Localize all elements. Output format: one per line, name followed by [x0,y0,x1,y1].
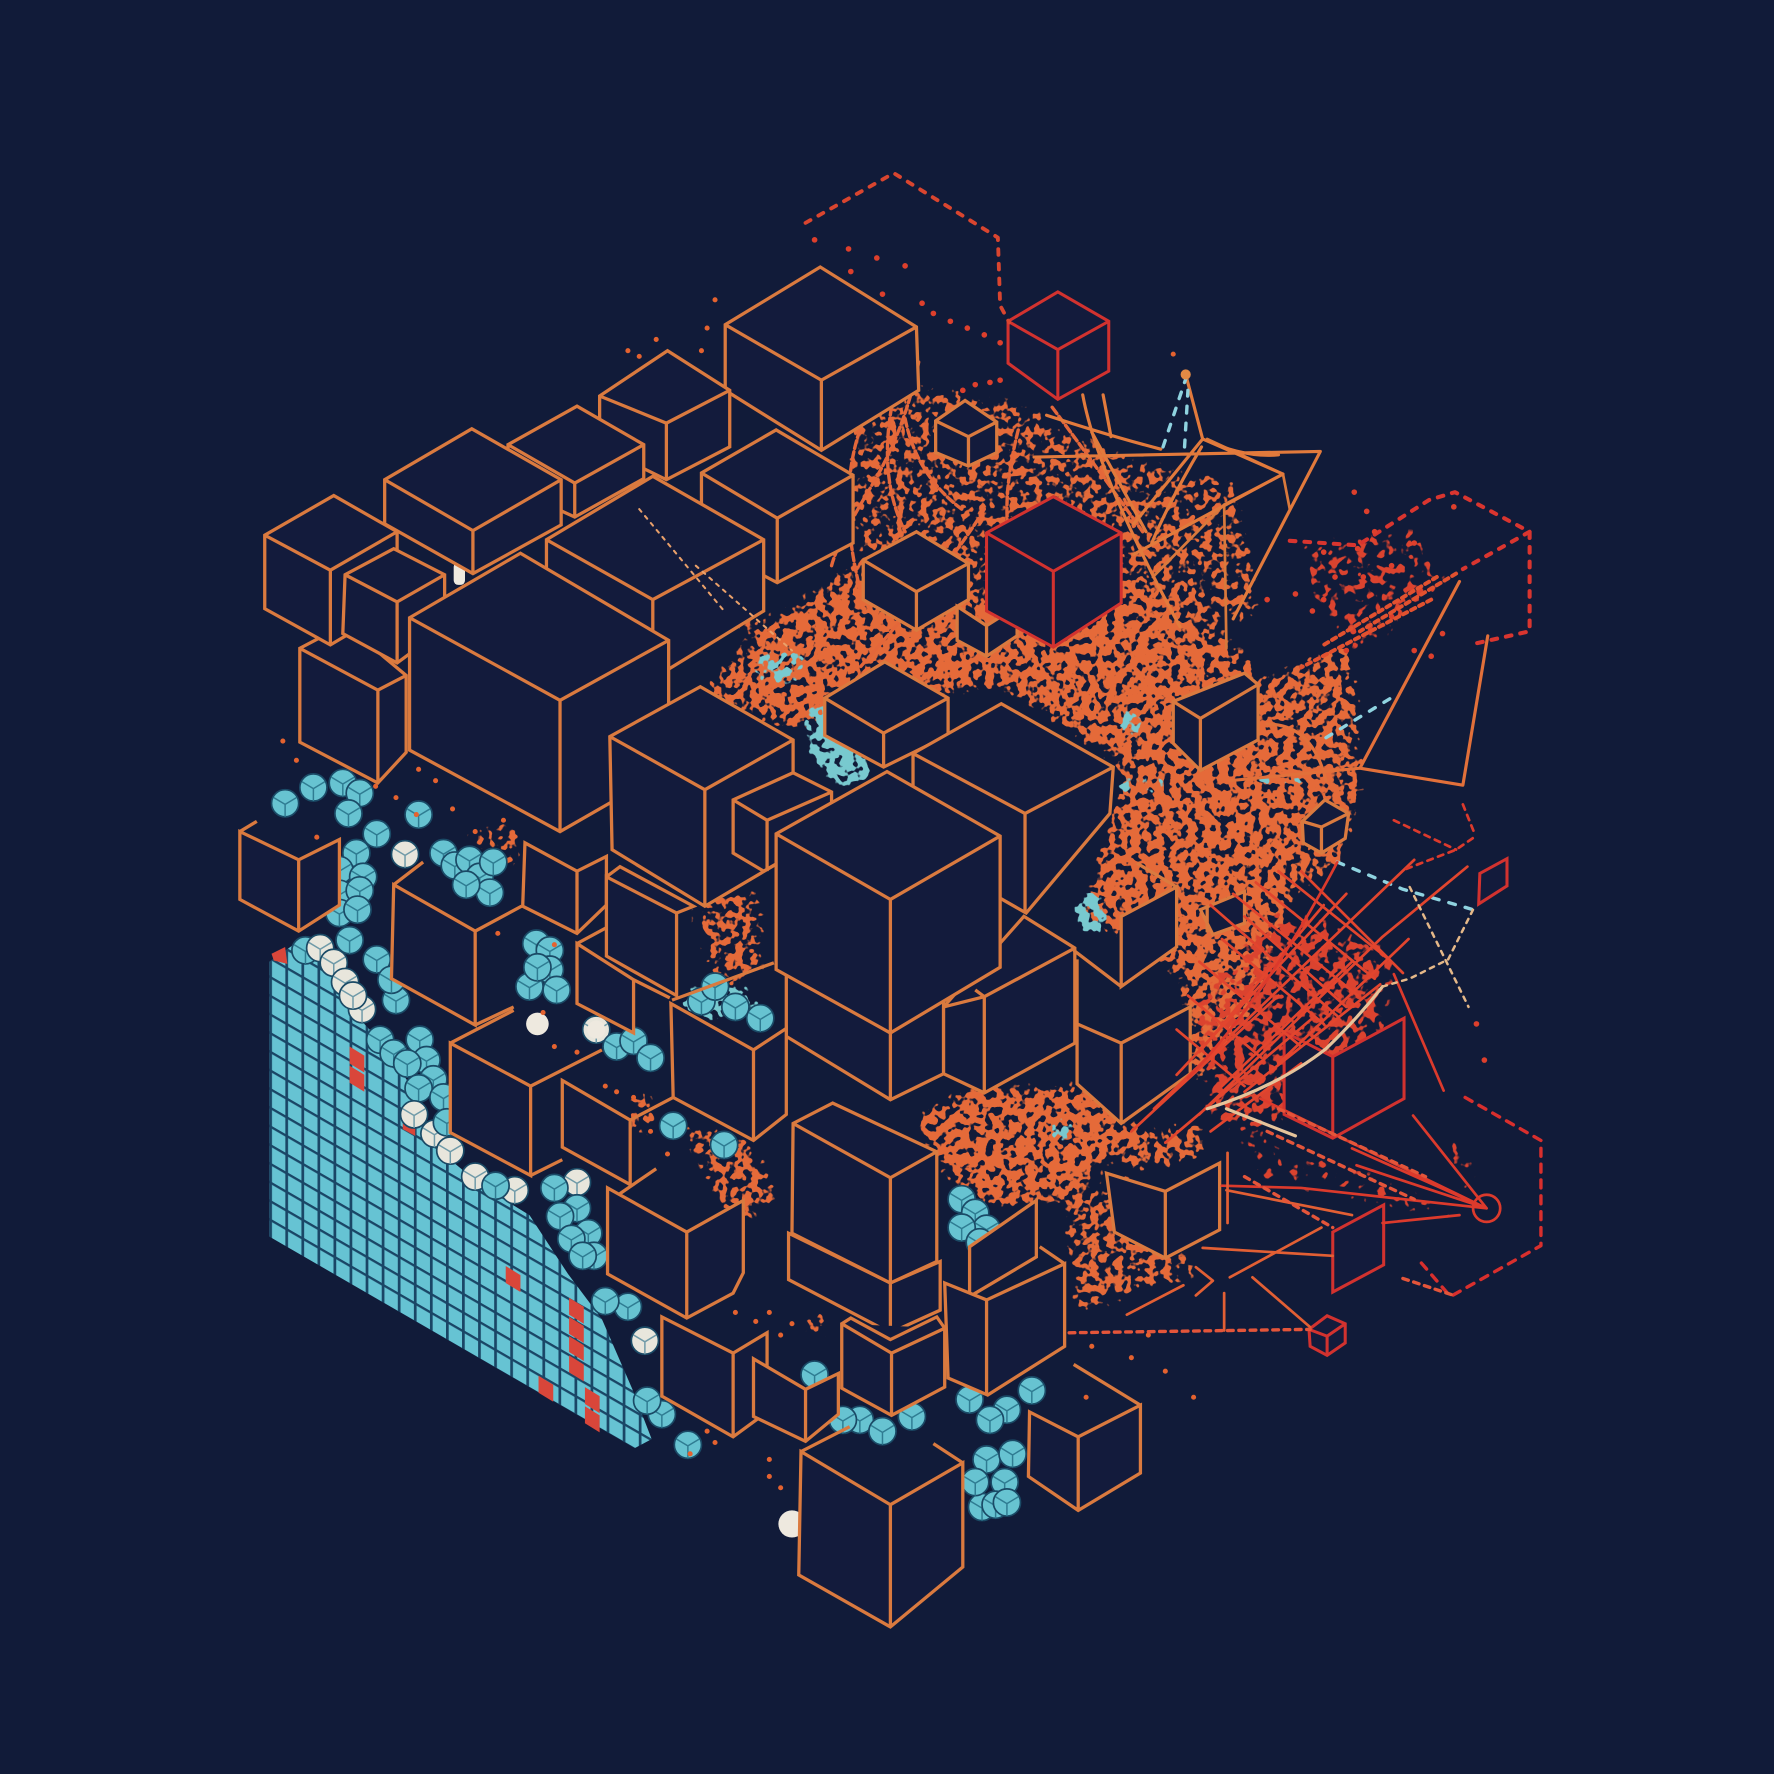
cube 18: open top [240,821,339,931]
cube 5 [300,625,406,783]
cube 12 [913,704,1113,913]
cube 1 [725,267,919,450]
cube 48: red face [1333,1205,1384,1292]
cube 30: tall [792,1103,937,1283]
panel: teal tile grid wall [269,938,652,1448]
cube 38: open top [957,606,1017,656]
faint orange cube upper right [1153,439,1290,648]
cube 23: open top [671,963,786,1140]
cube 37 [863,532,968,630]
cube 45: small [1302,800,1349,853]
cubes, back to front [240,267,1507,1627]
right strands [1230,582,1488,785]
star tip dot [1181,369,1191,380]
cube 2 [600,351,730,480]
white particles [454,562,806,1538]
cube 14 [610,687,793,906]
cube 28: open top [753,1359,838,1441]
cube 24: left face, open top [450,1010,602,1176]
cube 27: open top [662,1317,767,1437]
cube 9 [546,476,764,679]
cube 8 [701,430,853,583]
cream strands [1207,987,1383,1136]
cube 26: open top [608,1169,743,1318]
cube 31 [842,1317,945,1415]
cube 19: left face [391,862,522,1025]
cube 40: red [987,497,1121,647]
particle web: cyan patches [679,647,1329,1147]
cube 41 [1173,673,1258,770]
lower right red net [1069,804,1500,1333]
cube 4 [385,429,561,574]
cube 43: open top [1077,959,1190,1123]
cyan dashed trails [1163,379,1473,910]
cube 13: open top [523,843,606,933]
cube 22: central [776,772,1000,1033]
cube 47: red [1284,1018,1404,1138]
cube 15 [733,773,832,871]
cube 50: red tilted [1479,859,1507,904]
thin streaks across upper cubes [639,509,792,651]
upper right strands [1034,374,1320,627]
strands behind the cubes [832,362,1143,668]
dashed ghost cube: top [806,173,1009,322]
particle web: orange density field [436,373,1369,1346]
cube 7 [343,549,445,663]
cube 25: left face [562,1080,673,1185]
dashed ghost cube: lower right [1421,1097,1541,1297]
cube 34: open top [1028,1364,1140,1510]
cube 16: left face with top strip [606,867,694,996]
cube 11 [825,662,948,767]
cube 42: right face [1074,863,1177,987]
cube 17: left face [577,928,670,1033]
cube 33 [945,1247,1065,1395]
cube 39: red [1008,292,1109,399]
cube 36 [936,401,997,466]
dashed ghost cube: right [1290,492,1530,644]
cube 32 [970,1200,1036,1297]
cluster: cyan and white fragment blobs [272,769,1045,1521]
red dot scatter [815,240,1484,1060]
cube 49: red small [1309,1316,1345,1355]
cube 20 [786,911,944,1100]
cube 21 [944,916,1075,1093]
cube 44: open top [1106,1163,1220,1258]
cube 3 [508,406,644,517]
cube 29 [789,1233,940,1333]
cube 6 [265,496,397,645]
red tiles [272,947,600,1432]
cube 10 [410,553,669,832]
scattered orange dots [283,300,1194,1488]
cube 35: front bottom, open top [799,1427,963,1627]
cube 46: flat [1200,892,1245,935]
particle web: red density field [1188,520,1493,1233]
